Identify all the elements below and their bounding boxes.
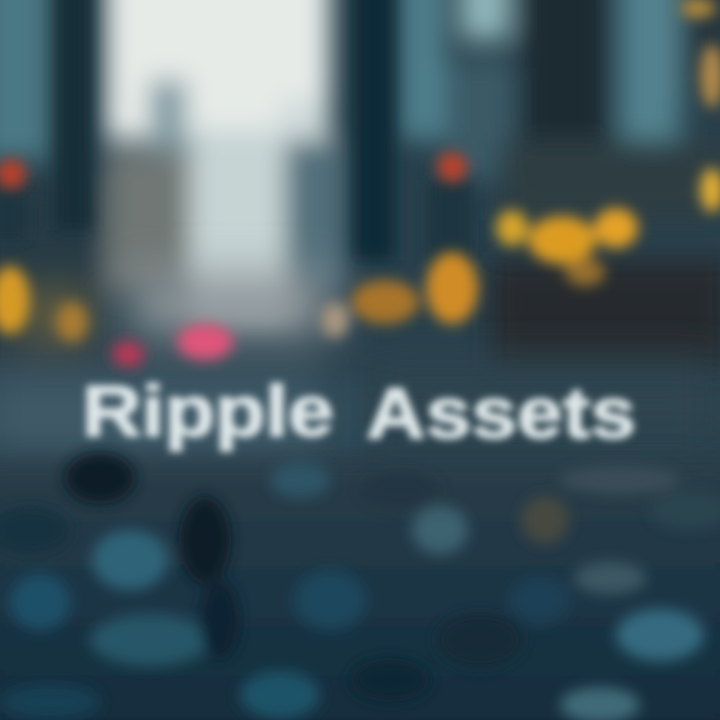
blurred title: Assets — [366, 374, 636, 454]
red signal lights — [0, 152, 467, 189]
sky and buildings — [0, 0, 720, 370]
amber bokeh lights — [0, 0, 720, 342]
blurred title — [82, 372, 636, 454]
dark poles — [0, 0, 472, 450]
foreground stones — [0, 452, 720, 720]
blurred title: Ripple — [82, 372, 334, 452]
street haze — [0, 275, 720, 460]
foreground rocks base — [0, 462, 720, 720]
pink lights — [112, 324, 233, 367]
